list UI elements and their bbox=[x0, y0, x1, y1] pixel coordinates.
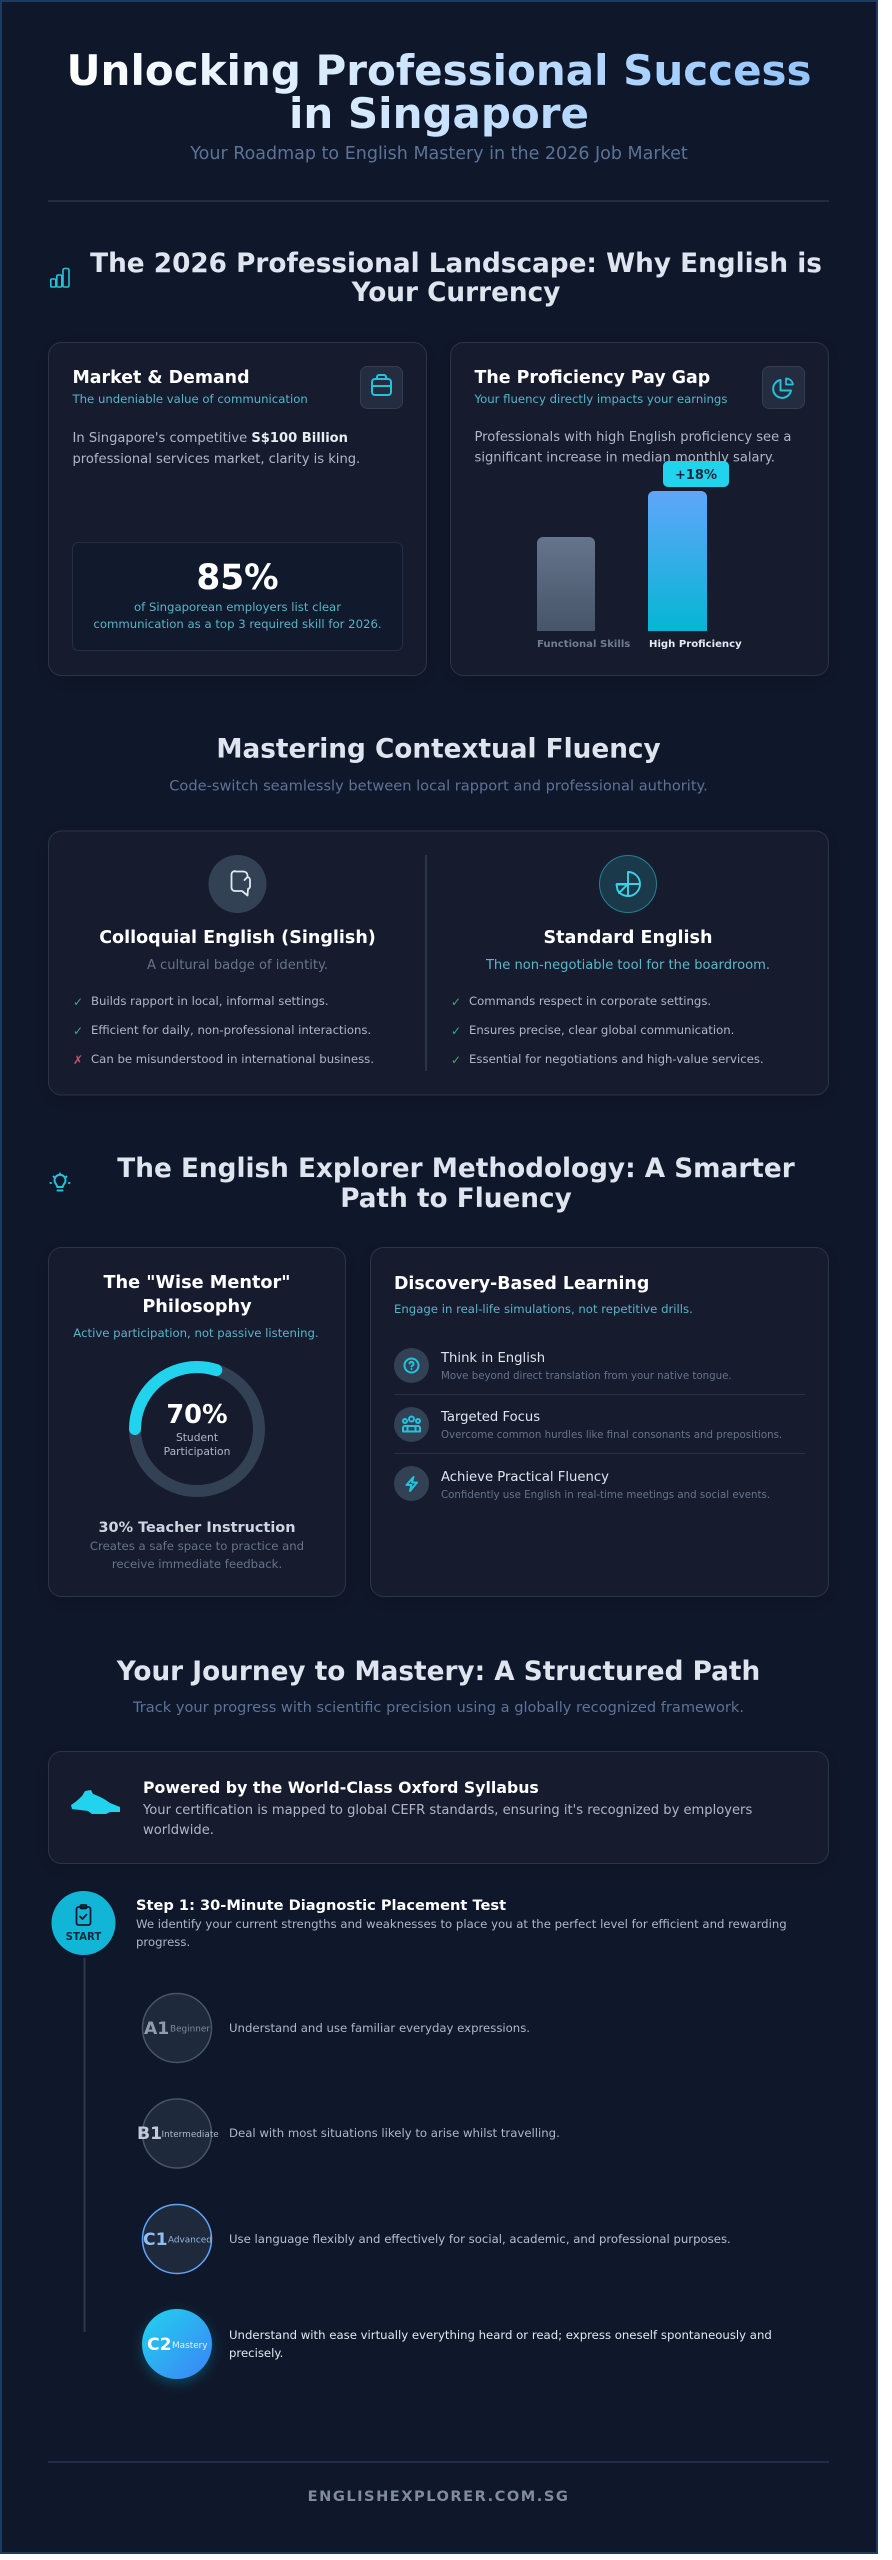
body text: Professionals with high English proficiency see a bbox=[474, 430, 791, 445]
stat callout: 85%: communication as a top 3 required skill for 2026. bbox=[93, 617, 382, 631]
title bbox=[66, 46, 812, 138]
stat callout: 85%: 85% bbox=[196, 558, 279, 598]
panel: colloquial vs standard comparison bbox=[48, 831, 828, 1095]
teacher instruction note: 30% Teacher Instruction bbox=[99, 1520, 295, 1536]
section heading: professional landscape: The 2026 Professional Landscape: Why English is bbox=[90, 249, 822, 279]
section heading: professional landscape bbox=[51, 249, 822, 308]
list: colloquial points: ✓ bbox=[73, 1024, 83, 1038]
level A1: Beginner bbox=[170, 2024, 210, 2034]
step 1: placement test: Step 1: 30-Minute Diagnostic Placement Test bbox=[136, 1897, 506, 1914]
level A1: Understand and use familiar everyday expressions. bbox=[229, 2021, 530, 2035]
icon: briefcase bbox=[360, 366, 402, 408]
section heading: professional landscape: Your Currency bbox=[351, 278, 560, 308]
list: standard points: Commands respect in corporate settings. bbox=[469, 994, 711, 1008]
list: colloquial points: Can be misunderstood in international business. bbox=[91, 1052, 374, 1066]
panel: discovery-based learning bbox=[370, 1248, 828, 1596]
level B1: Deal with most situations likely to arise whilst travelling. bbox=[229, 2126, 560, 2140]
body text bbox=[72, 431, 360, 467]
icon: pie chart bbox=[762, 366, 804, 408]
donut chart: 70% student participation: Participation bbox=[164, 1445, 230, 1458]
section subtitle: Code-switch seamlessly between local rapport and professional authority. bbox=[169, 778, 708, 794]
panel: oxford syllabus: Your certification is mapped to global CEFR standards, ensuring it's recognized by employers bbox=[142, 1803, 752, 1818]
card heading: Philosophy bbox=[142, 1297, 252, 1317]
step 1: placement test: progress. bbox=[136, 1935, 190, 1949]
item: targeted focus: Overcome common hurdles like final consonants and prepositions. bbox=[441, 1429, 782, 1441]
level C2: Understand with ease virtually everything heard or read; express oneself spontaneously and bbox=[229, 2328, 772, 2342]
bar chart: Functional Skills bbox=[537, 639, 630, 650]
body text bbox=[474, 430, 791, 466]
list: colloquial points bbox=[73, 994, 374, 1067]
card subheading: Engage in real-life simulations, not repetitive drills. bbox=[394, 1302, 693, 1316]
footer: ENGLISHEXPLORER.COM.SG bbox=[308, 2488, 569, 2505]
level C1: C1 bbox=[143, 2230, 168, 2250]
callout: +18% bbox=[663, 461, 729, 487]
bar chart bbox=[537, 461, 742, 650]
donut chart: 70% student participation: Student bbox=[176, 1431, 218, 1444]
title: in Singapore bbox=[289, 89, 589, 138]
level A1 bbox=[142, 1994, 530, 2062]
level C2: C2 bbox=[147, 2335, 172, 2355]
donut chart: 70% student participation: 70% bbox=[166, 1400, 228, 1430]
list: colloquial points: Efficient for daily, non-professional interactions. bbox=[91, 1023, 371, 1037]
callout: +18%: +18% bbox=[675, 468, 717, 483]
stat callout: 85%: of Singaporean employers list clear bbox=[134, 600, 341, 614]
heading: journey to mastery: Your Journey to Mastery: A Structured Path bbox=[116, 1657, 760, 1687]
body text: significant increase in median monthly salary. bbox=[474, 450, 775, 466]
item: practical fluency bbox=[394, 1466, 770, 1501]
list: standard points: Essential for negotiations and high-value services. bbox=[469, 1052, 764, 1066]
card subheading: The undeniable value of communication bbox=[72, 392, 308, 406]
title: Unlocking Professional Success bbox=[66, 46, 812, 95]
column: colloquial english: A cultural badge of identity. bbox=[147, 958, 328, 973]
list: colloquial points: ✓ bbox=[73, 995, 83, 1009]
card heading: Market & Demand bbox=[72, 368, 250, 388]
level C1: Advanced bbox=[168, 2236, 212, 2246]
level B1 bbox=[137, 2099, 560, 2168]
column: standard english: Standard English bbox=[544, 928, 712, 948]
column: standard english bbox=[451, 856, 770, 1067]
item: think in english: Move beyond direct translation from your native tongue. bbox=[441, 1370, 732, 1382]
panel: oxford syllabus: Powered by the World-Class Oxford Syllabus bbox=[143, 1778, 539, 1797]
list: standard points: ✓ bbox=[451, 1053, 461, 1067]
level C2: precisely. bbox=[229, 2346, 283, 2360]
panel: oxford syllabus: worldwide. bbox=[143, 1823, 214, 1838]
panel: market and demand bbox=[48, 342, 426, 676]
level B1: B1 bbox=[137, 2124, 162, 2144]
list: standard points: Ensures precise, clear global communication. bbox=[469, 1023, 734, 1037]
card heading: The Proficiency Pay Gap bbox=[474, 368, 710, 388]
level C2: Mastery bbox=[172, 2341, 208, 2351]
teacher instruction note bbox=[90, 1520, 304, 1571]
subtitle: Your Roadmap to English Mastery in the 2026 Job Market bbox=[189, 144, 688, 164]
list: standard points: ✓ bbox=[451, 995, 461, 1009]
item: targeted focus bbox=[394, 1407, 782, 1442]
panel: proficiency pay gap bbox=[450, 342, 828, 676]
item: practical fluency: Achieve Practical Fluency bbox=[441, 1470, 609, 1485]
card heading bbox=[103, 1273, 291, 1317]
section subtitle: Track your progress with scientific precision using a globally recognized framework. bbox=[132, 1699, 744, 1716]
icon: start badge bbox=[52, 1891, 116, 1955]
body text: In Singapore's competitive S$100 Billion bbox=[72, 431, 348, 446]
card subheading: Active participation, not passive listening. bbox=[73, 1326, 319, 1340]
section heading: methodology: The English Explorer Methodology: A Smarter bbox=[117, 1154, 795, 1184]
column: colloquial english: Colloquial English (Singlish) bbox=[99, 928, 376, 948]
list: colloquial points: ✗ bbox=[73, 1053, 83, 1067]
card subheading: Your fluency directly impacts your earnings bbox=[474, 392, 727, 406]
icon: start badge: START bbox=[66, 1932, 101, 1943]
item: targeted focus: Targeted Focus bbox=[440, 1410, 540, 1425]
icon: light bulb bbox=[50, 1174, 70, 1190]
column: standard english: The non-negotiable tool for the boardroom. bbox=[485, 958, 770, 973]
section heading: methodology: Path to Fluency bbox=[340, 1184, 572, 1214]
level B1: Intermediate bbox=[162, 2130, 219, 2140]
list: standard points: ✓ bbox=[451, 1024, 461, 1038]
item: practical fluency: Confidently use English in real-time meetings and social events. bbox=[441, 1489, 770, 1501]
body text: professional services market, clarity is king. bbox=[72, 452, 360, 467]
level C1: Use language flexibly and effectively for social, academic, and professional purposes. bbox=[229, 2232, 731, 2246]
list: colloquial points: Builds rapport in local, informal settings. bbox=[91, 994, 329, 1008]
panel: oxford syllabus bbox=[48, 1752, 828, 1864]
item: think in english: Think in English bbox=[440, 1351, 545, 1366]
icon: graduation mark bbox=[71, 1790, 120, 1814]
heading: contextual fluency: Mastering Contextual Fluency bbox=[216, 734, 661, 764]
step 1: placement test bbox=[52, 1891, 787, 1955]
panel: wise mentor philosophy bbox=[48, 1248, 346, 1596]
icon: quartered disc bbox=[600, 856, 656, 912]
list: standard points bbox=[451, 994, 764, 1067]
icon: speech bubble bbox=[208, 855, 266, 913]
level A1: A1 bbox=[144, 2019, 169, 2039]
timeline connector bbox=[84, 1958, 86, 2332]
step 1: placement test: We identify your current strengths and weaknesses to place you at the perfect level for efficient and rewarding bbox=[136, 1917, 787, 1931]
bar chart: High Proficiency bbox=[649, 639, 742, 650]
level C1 bbox=[142, 2204, 731, 2274]
level C2 bbox=[142, 2309, 772, 2379]
card heading: Discovery-Based Learning bbox=[394, 1274, 649, 1294]
teacher instruction note: receive immediate feedback. bbox=[112, 1557, 282, 1571]
item: think in english bbox=[394, 1348, 732, 1383]
card heading: The "Wise Mentor" bbox=[103, 1273, 291, 1293]
teacher instruction note: Creates a safe space to practice and bbox=[90, 1539, 304, 1553]
stat callout: 85% bbox=[72, 542, 402, 650]
section heading: methodology bbox=[50, 1154, 795, 1214]
icon: bar chart bbox=[51, 268, 69, 287]
donut chart: 70% student participation bbox=[135, 1367, 259, 1491]
column: colloquial english bbox=[73, 855, 376, 1067]
